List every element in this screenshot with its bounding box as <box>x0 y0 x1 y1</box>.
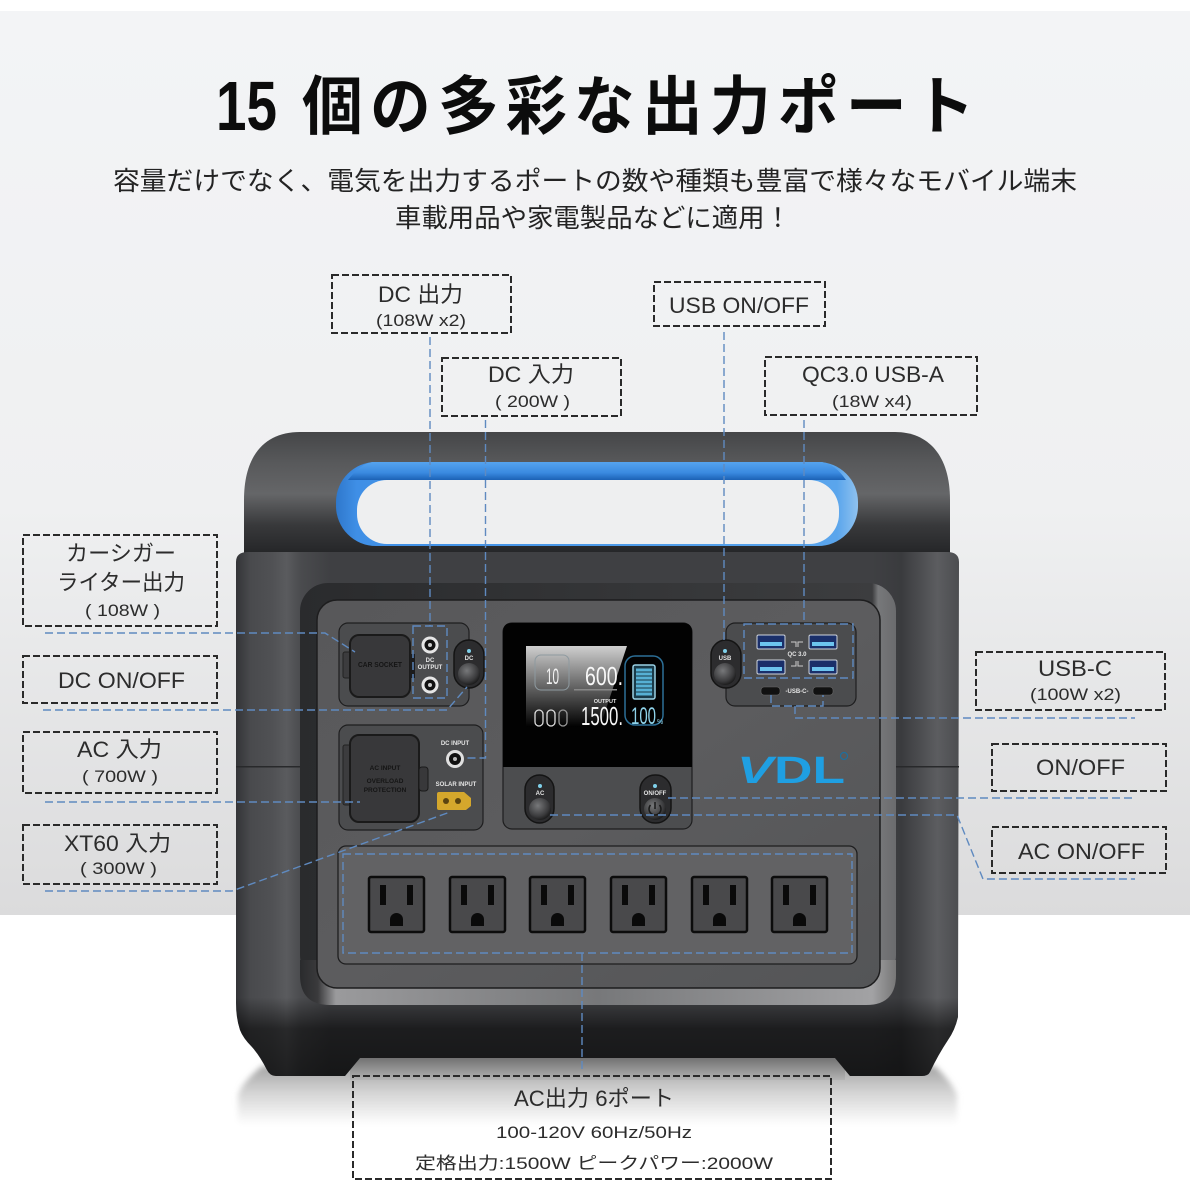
AC input group: AC INPUT <box>370 765 400 772</box>
outlet 1 <box>369 877 424 932</box>
label: cigarette lighter output: ( 108W ) <box>85 601 160 620</box>
label: DC output: DC 出力 <box>378 282 463 307</box>
label: DC output: (108W x2) <box>376 311 466 330</box>
label: XT60 input: ( 300W ) <box>80 859 157 878</box>
power station <box>236 432 959 1076</box>
label: AC output <box>353 1076 831 1179</box>
label: AC input: ( 700W ) <box>82 767 158 786</box>
label: AC on/off <box>992 827 1166 873</box>
ON/OFF button: ON/OFF <box>644 791 667 797</box>
label: cigarette lighter output: ライター出力 <box>57 570 185 595</box>
DC button <box>454 640 484 688</box>
AC input group: DC INPUT <box>441 741 469 747</box>
label: DC on/off: DC ON/OFF <box>58 668 185 693</box>
VDL logo: DL <box>774 750 845 792</box>
label: DC input <box>442 358 621 416</box>
main body <box>236 552 959 1076</box>
USB button <box>711 640 741 688</box>
USB button: USB <box>719 656 732 662</box>
label: AC output: 定格出力:1500W ピークパワー:2000W <box>415 1154 773 1173</box>
outlet 6 <box>772 877 827 932</box>
DC output group: DC <box>426 658 435 664</box>
label: ON/OFF: ON/OFF <box>1036 755 1125 780</box>
VDL logo: V <box>737 750 777 792</box>
VDL logo <box>737 750 848 792</box>
outlet 2 <box>450 877 505 932</box>
label: AC input: AC 入力 <box>77 737 162 762</box>
label: DC input: ( 200W ) <box>495 392 570 411</box>
outlet 5 <box>692 877 747 932</box>
AC button <box>525 775 554 823</box>
label: AC on/off: AC ON/OFF <box>1018 839 1145 864</box>
label: cigarette lighter output <box>23 535 217 626</box>
label: USB-C: USB-C <box>1038 656 1112 681</box>
outlet 4 <box>611 877 666 932</box>
ON/OFF button <box>640 775 671 823</box>
subtitle <box>113 166 1077 233</box>
LCD screen: 100 <box>631 703 656 730</box>
display panel <box>503 623 692 829</box>
AC input group <box>339 725 483 830</box>
AC outlet panel <box>338 846 857 964</box>
label: AC input <box>23 732 217 793</box>
AC input group: OVERLOAD <box>367 778 404 785</box>
USB port group: -USB-C- <box>786 689 808 695</box>
AC input group: SOLAR INPUT <box>436 782 477 788</box>
label: USB on/off: USB ON/OFF <box>669 293 809 318</box>
LCD screen: OUTPUT <box>594 699 617 705</box>
LCD screen: % <box>657 719 663 726</box>
label: ON/OFF <box>992 744 1166 791</box>
USB port group: QC 3.0 <box>787 652 807 658</box>
LCD screen <box>526 646 663 731</box>
label: DC on/off <box>23 656 217 703</box>
DC output group: CAR SOCKET <box>358 662 403 669</box>
label: USB-C: (100W x2) <box>1030 685 1121 704</box>
floor shadow <box>238 1056 957 1125</box>
title: 15 <box>216 67 277 145</box>
AC button: AC <box>536 791 545 797</box>
AC input group: PROTECTION <box>364 787 407 794</box>
label: XT60 input <box>23 825 217 884</box>
label: XT60 input: XT60 入力 <box>64 831 171 856</box>
DC output group: OUTPUT <box>418 665 443 671</box>
DC button: DC <box>465 656 474 662</box>
LCD screen: 1500. <box>581 701 623 731</box>
label: AC output: AC出力 6ポート <box>514 1086 674 1111</box>
label: AC output: 100-120V 60Hz/50Hz <box>496 1123 692 1142</box>
DC output group <box>339 623 469 706</box>
label: QC3.0 USB-A <box>765 357 977 415</box>
label: DC output <box>332 275 511 333</box>
label: USB-C <box>976 652 1165 710</box>
callout leader lines <box>43 332 1135 1072</box>
handle <box>244 432 950 556</box>
label: QC3.0 USB-A: QC3.0 USB-A <box>802 362 944 387</box>
USB port group <box>726 623 856 706</box>
title: 個の多彩な出力ポート <box>302 72 975 143</box>
label: DC input: DC 入力 <box>488 362 574 387</box>
label: QC3.0 USB-A: (18W x4) <box>832 392 912 411</box>
label: cigarette lighter output: カーシガー <box>66 541 176 566</box>
outlet 3 <box>530 877 585 932</box>
LCD screen: 600. <box>585 661 623 691</box>
subtitle: 車載用品や家電製品などに適用！ <box>395 203 791 233</box>
LCD screen: 10 <box>546 664 559 689</box>
subtitle: 容量だけでなく、電気を出力するポートの数や種類も豊富で様々なモバイル端末 <box>113 166 1077 196</box>
label: USB on/off <box>654 282 825 326</box>
